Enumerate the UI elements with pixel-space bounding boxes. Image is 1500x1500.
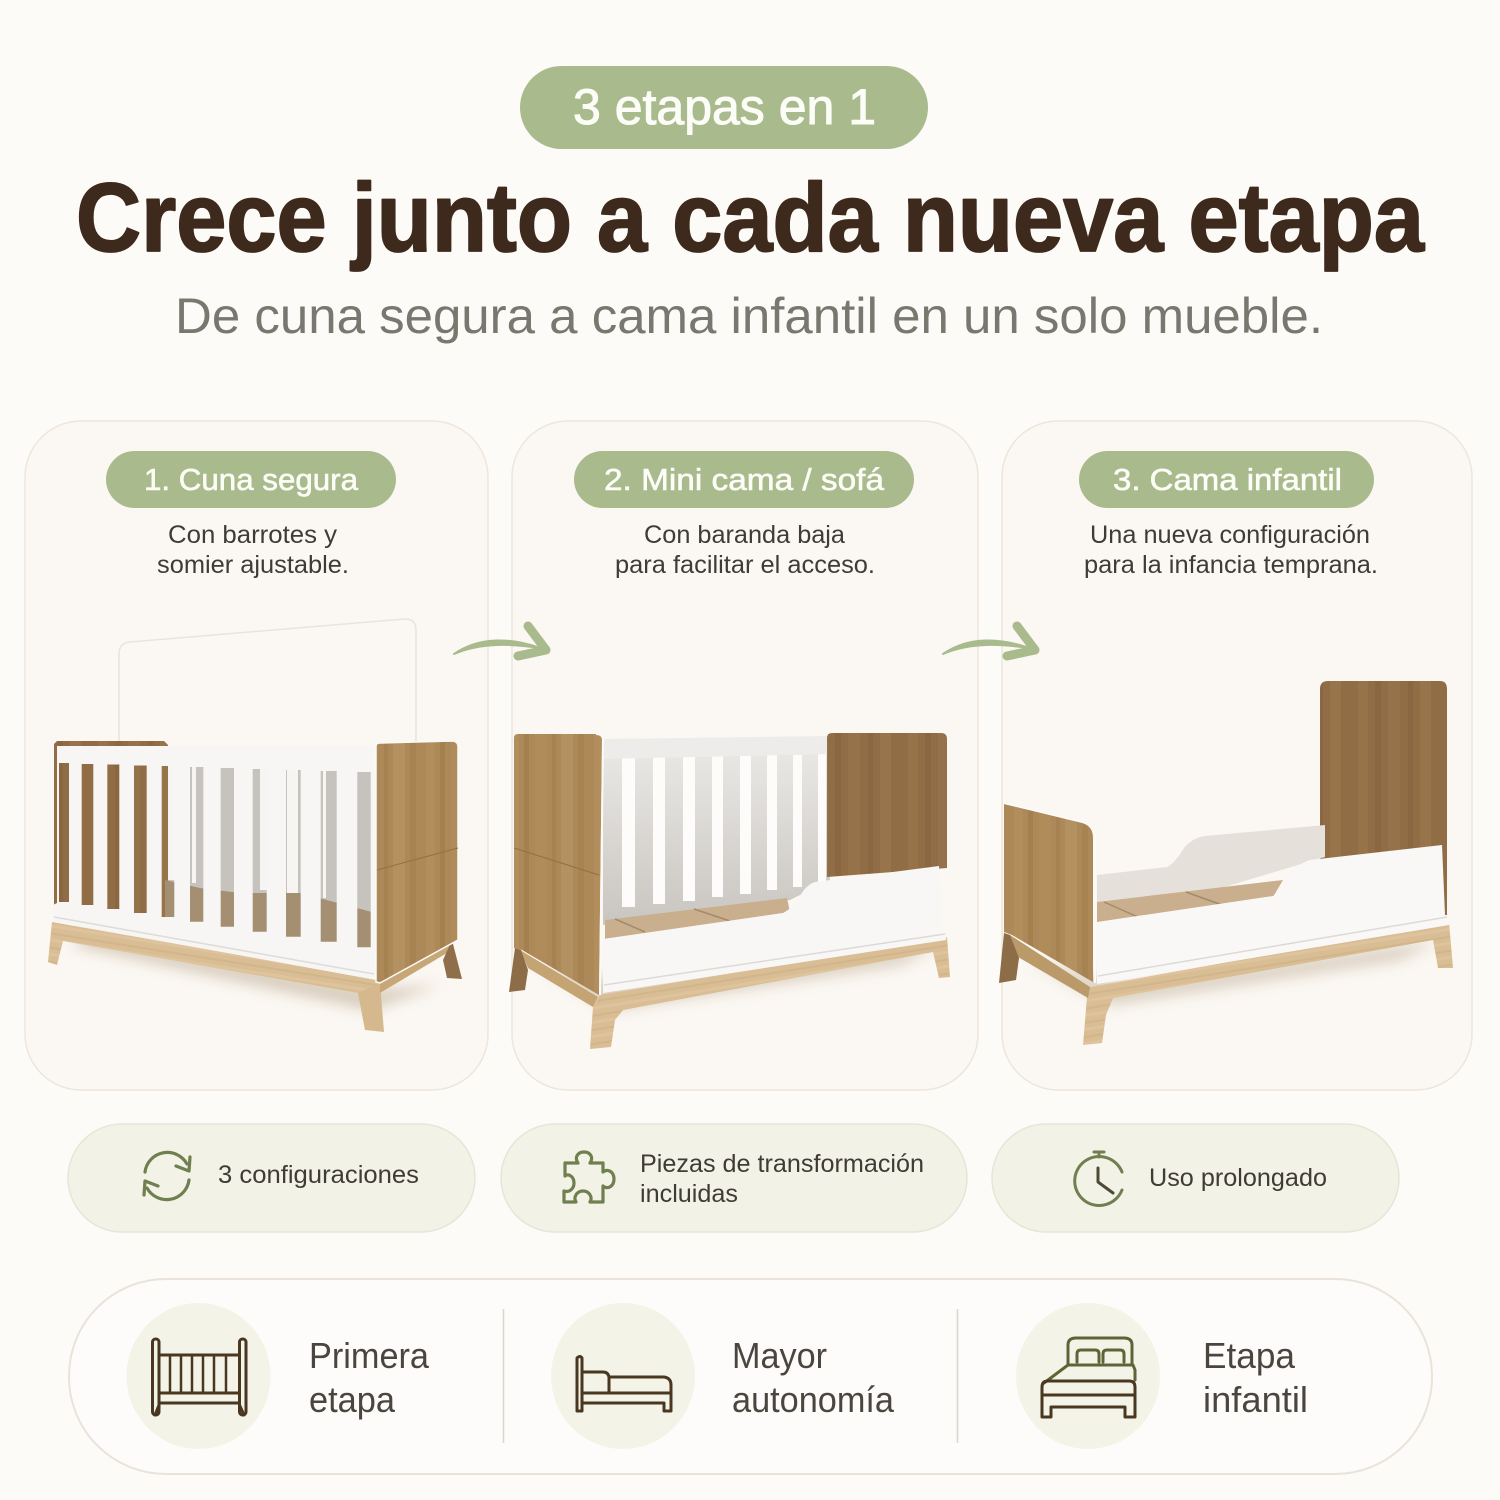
subtitle: De cuna segura a cama infantil en un solo mueble.	[175, 288, 1323, 344]
icon: refresh arrows	[144, 1152, 190, 1200]
panel: stage 3 toddler bed	[999, 421, 1472, 1090]
summary item: etapa infantil: infantil	[1203, 1379, 1308, 1420]
icon: puzzle piece	[564, 1152, 614, 1202]
back slats	[603, 752, 830, 925]
feature pill: uso prolongado	[992, 1124, 1399, 1232]
top badge: 3 etapas en 1	[520, 66, 928, 149]
summary item: mayor autonomía: Mayor	[732, 1335, 827, 1376]
stage 3 description	[1084, 521, 1378, 579]
feature pill: 3 configuraciones: 3 configuraciones	[218, 1161, 419, 1189]
stage 1 description: somier ajustable.	[157, 551, 349, 579]
panel: stage 2 mini bed	[509, 421, 978, 1090]
stage 2 description: para facilitar el acceso.	[615, 551, 875, 579]
stage 1 description	[157, 521, 349, 579]
feature pill: uso prolongado: Uso prolongado	[1149, 1164, 1327, 1192]
oak base	[1083, 922, 1453, 1045]
stage 3 label pill	[1079, 451, 1374, 508]
icon: crib	[152, 1339, 246, 1415]
icon: double bed	[1042, 1338, 1135, 1417]
arrow: stage 2 to stage 3	[943, 626, 1035, 656]
summary item: mayor autonomía: autonomía	[732, 1379, 895, 1420]
feature pill: piezas de transformación: incluidas	[640, 1180, 738, 1208]
slatted base	[1097, 880, 1283, 923]
title: Crece junto a cada nueva etapa	[76, 163, 1425, 272]
stage 1 label pill	[106, 451, 396, 508]
interior behind bars	[60, 746, 372, 950]
slatted base	[605, 898, 790, 940]
stage 2 label pill	[574, 451, 914, 508]
feature pill: piezas de transformación: Piezas de transformación	[640, 1150, 924, 1178]
summary item: etapa infantil: Etapa	[1203, 1335, 1296, 1376]
summary item: primera etapa	[126, 1303, 430, 1449]
stage 1 description: Con barrotes y	[168, 521, 338, 549]
summary item: primera etapa: Primera	[309, 1335, 430, 1376]
stage 3 label pill: 3. Cama infantil	[1113, 462, 1342, 497]
white front with bars	[53, 746, 376, 980]
panel: stage summary bar	[69, 1279, 1432, 1474]
left wood panel	[514, 734, 602, 995]
stage 1 label pill: 1. Cuna segura	[144, 462, 359, 497]
top badge: 3 etapas en 1: 3 etapas en 1	[573, 79, 876, 135]
summary item: mayor autonomía	[551, 1303, 895, 1449]
back rail	[1097, 825, 1325, 925]
oak base	[590, 937, 950, 1049]
stage 3 description: Una nueva configuración	[1090, 521, 1370, 549]
stage 2 label pill: 2. Mini cama / sofá	[604, 462, 885, 497]
arrow: stage 1 to stage 2	[454, 626, 546, 656]
icon: stopwatch	[1075, 1152, 1122, 1206]
stage 2 description	[615, 521, 875, 579]
stage 3 description: para la infancia temprana.	[1084, 551, 1378, 579]
tall headboard	[1320, 681, 1447, 915]
toddler bed illustration	[999, 681, 1453, 1045]
base	[48, 922, 380, 993]
crib illustration	[48, 619, 462, 1032]
dark headboard	[827, 733, 947, 877]
panel: stage 1 crib	[25, 421, 488, 1090]
summary item: etapa infantil	[1016, 1303, 1308, 1449]
mini bed illustration	[509, 733, 950, 1049]
footboard	[1004, 804, 1093, 982]
icon: low-rail bed	[577, 1356, 671, 1411]
stage 2 description: Con baranda baja	[644, 521, 845, 549]
white front panel	[603, 866, 946, 993]
side wood panel	[376, 741, 458, 983]
feature pill: piezas de transformación	[501, 1124, 967, 1232]
summary item: primera etapa: etapa	[309, 1379, 396, 1420]
white front panel	[1097, 845, 1449, 984]
feature pill: 3 configuraciones	[68, 1124, 475, 1232]
